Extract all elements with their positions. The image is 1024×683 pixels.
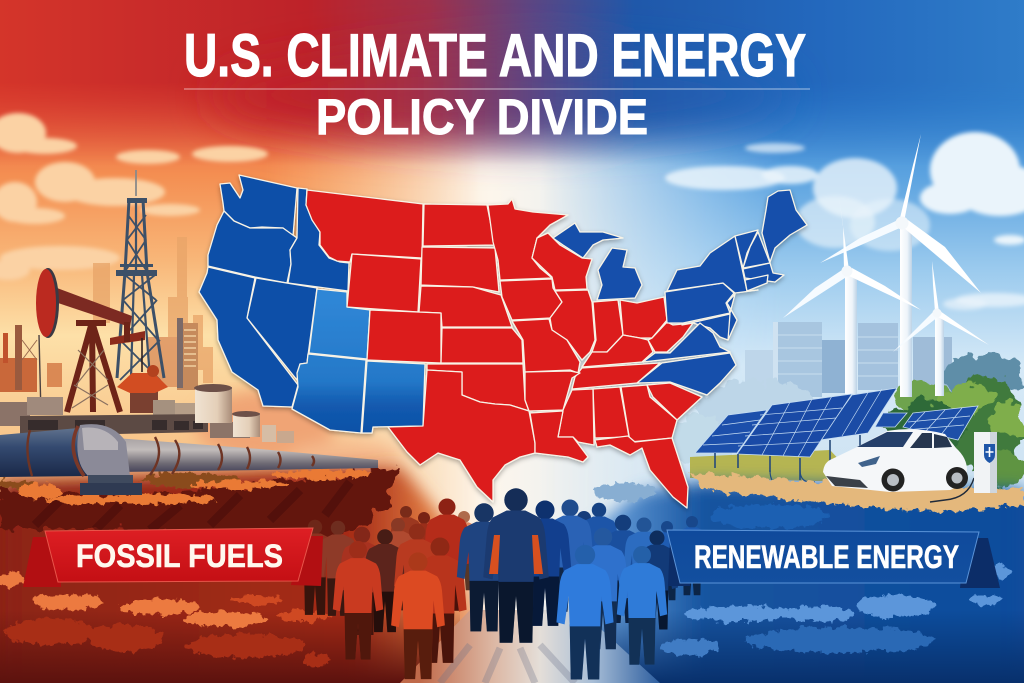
crowd: red supporters [295,498,481,679]
faded city skyline: left [47,237,213,387]
refinery factory [0,325,37,392]
crowd: blue supporters [457,500,709,679]
buildings: right city [745,322,952,398]
title line 1: U.S. CLIMATE AND ENERGY [184,22,806,89]
pale tree haze behind solar panels [665,380,815,465]
ground: left foreground [0,466,495,683]
map: red states [306,190,702,508]
building: left city [177,318,198,390]
map: blue eastern states [553,190,807,395]
industrial blocks and tanks [0,384,294,443]
turbine: large [820,134,981,397]
pumpjack [36,268,145,415]
clouds: left sky [0,113,268,280]
EV charger [974,432,997,493]
map of the United States [199,175,807,508]
map: lighter blue states [292,289,425,433]
electric car [823,429,974,502]
turbine: middle [783,197,921,394]
banner: fossil fuels [23,528,323,587]
solar panels [695,388,978,483]
orange haze beneath map: left [195,390,400,469]
map: blue western states [199,175,349,407]
ground: right foreground [535,473,1024,683]
grass strip [690,450,860,482]
turbine: small [893,261,989,396]
foliage: left [0,469,370,667]
wind turbines [783,134,989,397]
title line 2: POLICY DIVIDE [316,89,648,145]
center path with shadows [400,610,660,683]
title divider [184,88,810,90]
title [184,22,810,145]
wellhead dome [117,365,168,413]
crowd: central figure [483,488,549,643]
oil derrick [116,170,164,380]
banner: renewable energy [667,530,1000,588]
pipeline [0,424,378,495]
clouds: right sky [665,132,1024,310]
trees: right [885,353,1024,486]
foliage: right [595,483,1009,655]
banner: fossil fuels: FOSSIL FUELS [76,538,283,574]
